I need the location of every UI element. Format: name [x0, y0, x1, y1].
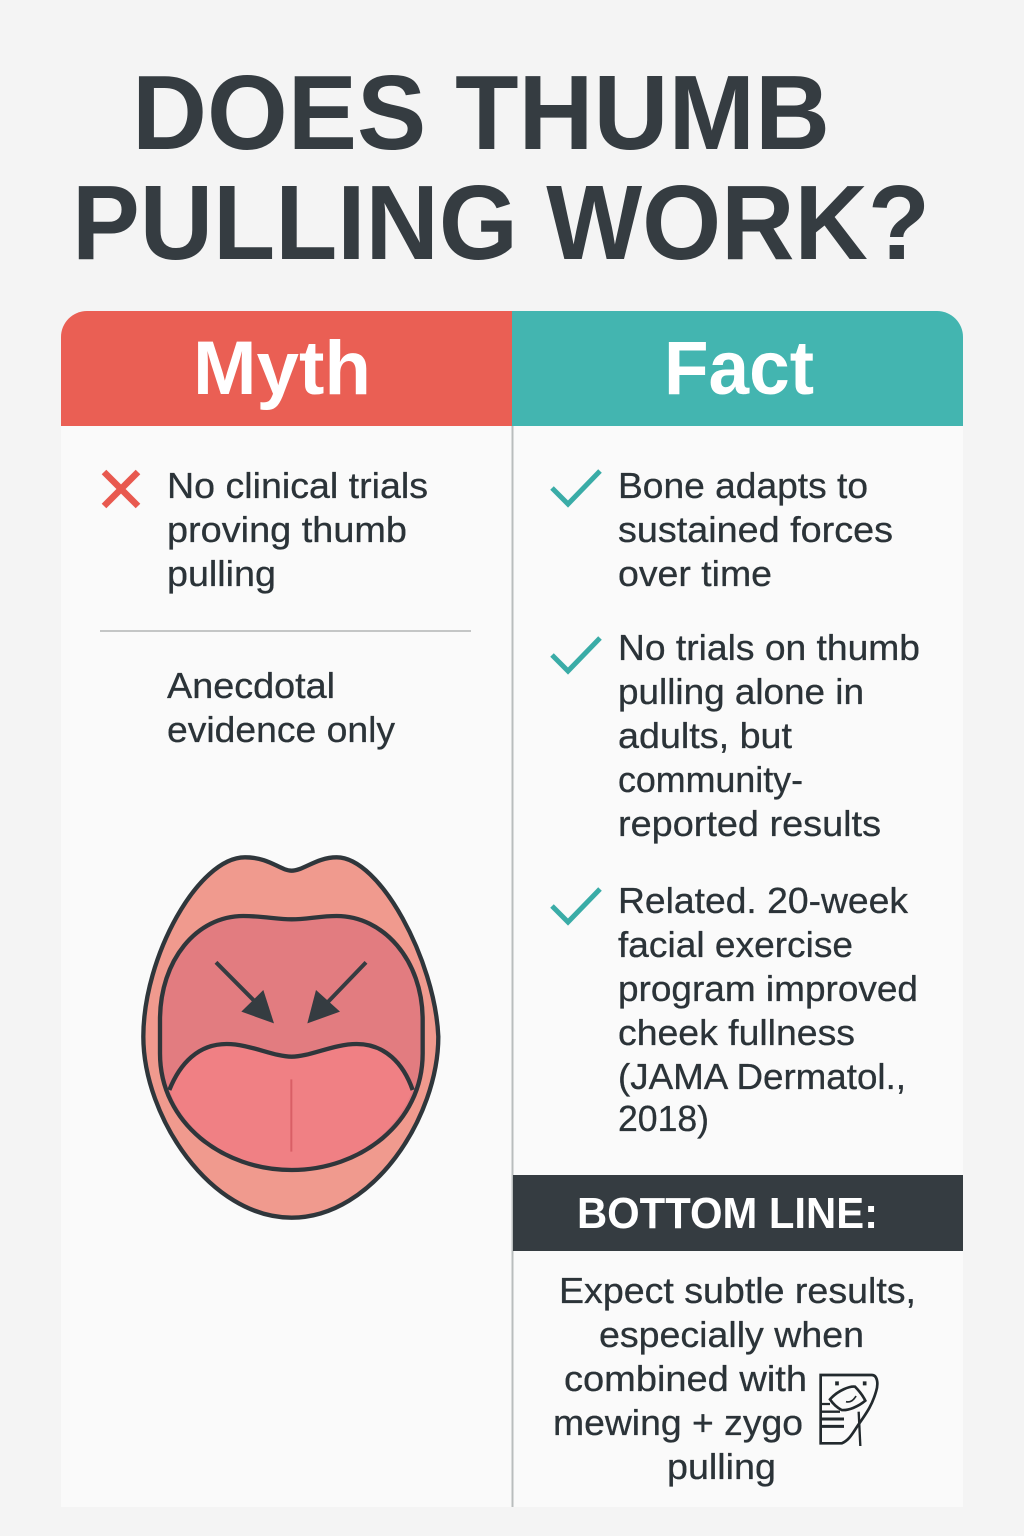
illustration: open mouth with inward arrows	[143, 857, 438, 1218]
fact column	[513, 465, 963, 1487]
title: PULLING WORK?	[72, 164, 930, 282]
fact item: related facial exercise: 2018)	[618, 1098, 709, 1139]
fact item: related facial exercise: program improved	[618, 968, 918, 1009]
myth item: no clinical trials: No clinical trials	[167, 465, 428, 506]
fact item: bone adapts: sustained forces	[618, 509, 893, 550]
bottom line text	[553, 1270, 916, 1487]
header: fact	[512, 311, 963, 426]
bottom line text: mewing + zygo	[553, 1402, 803, 1443]
header: myth	[61, 311, 512, 426]
fact item: related facial exercise	[552, 880, 918, 1139]
bottom line text: especially when	[599, 1314, 864, 1355]
title	[72, 54, 930, 282]
fact item: no trials: community-	[618, 759, 803, 800]
fact item: related facial exercise: facial exercise	[618, 924, 853, 965]
myth item: anecdotal evidence: evidence only	[167, 709, 395, 750]
myth item: anecdotal evidence	[167, 665, 395, 750]
icon: red cross	[104, 472, 138, 506]
fact item: bone adapts: over time	[618, 553, 772, 594]
fact item: no trials: pulling alone in	[618, 671, 864, 712]
bottom line banner: BOTTOM LINE:	[577, 1189, 878, 1238]
column divider	[512, 426, 514, 1507]
fact item: bone adapts: Bone adapts to	[618, 465, 868, 506]
fact item: no trials: No trials on thumb	[618, 627, 920, 668]
myth item: no clinical trials	[167, 465, 428, 594]
fact item: no trials: adults, but	[618, 715, 792, 756]
title: DOES THUMB	[132, 54, 830, 172]
bottom line text: pulling	[667, 1446, 776, 1487]
panel: comparison table	[61, 311, 963, 1507]
header: myth: Myth	[193, 326, 371, 411]
bottom line text: Expect subtle results,	[559, 1270, 916, 1311]
fact item: bone adapts	[552, 465, 893, 594]
myth item: anecdotal evidence: Anecdotal	[167, 665, 335, 706]
icon: face chart document	[821, 1375, 877, 1446]
fact item: related facial exercise: cheek fullness	[618, 1012, 855, 1053]
fact item: no trials: reported results	[618, 803, 881, 844]
fact item: related facial exercise: (JAMA Dermatol.,	[618, 1056, 906, 1097]
myth item: no clinical trials: proving thumb	[167, 509, 407, 550]
myth column	[100, 465, 471, 1218]
fact item: related facial exercise: Related. 20-week	[618, 880, 909, 921]
header: fact: Fact	[664, 326, 814, 411]
bottom line banner	[513, 1175, 963, 1251]
fact item: no trials	[552, 627, 920, 844]
myth item: no clinical trials: pulling	[167, 553, 276, 594]
bottom line text: combined with	[564, 1358, 807, 1399]
